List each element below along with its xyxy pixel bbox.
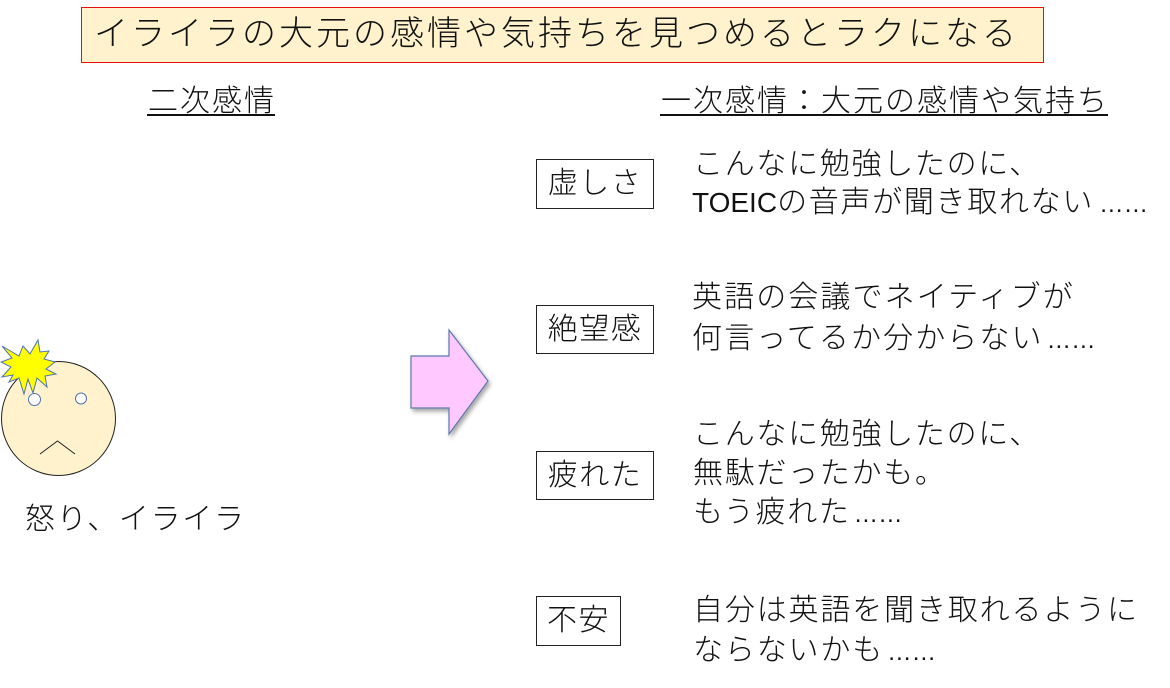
text: tired	[693, 418, 1041, 529]
icon: angry face	[0, 338, 116, 476]
label box: tired: 疲れた	[548, 459, 642, 492]
label: anger: 怒り、イライラ	[25, 503, 246, 536]
title banner	[81, 7, 1044, 63]
text: anxiety	[693, 594, 1139, 667]
heading: secondary emotion: 二次感情	[148, 85, 276, 118]
text: emptiness	[692, 148, 1148, 219]
text: emptiness: TOEICの音声が聞き取れない……	[692, 186, 1148, 219]
label box: anxiety	[536, 596, 621, 646]
text: tired: 無駄だったかも。	[693, 457, 947, 490]
heading: primary emotion: 一次感情：大元の感情や気持ち	[661, 85, 1109, 118]
text: tired: もう疲れた……	[693, 496, 903, 529]
label box: anxiety: 不安	[547, 604, 610, 637]
text: anxiety: ならないかも……	[693, 634, 936, 667]
text: tired: こんなに勉強したのに、	[693, 418, 1041, 451]
title text: イライラの大元の感情や気持ちを見つめるとラクになる	[94, 15, 1019, 53]
text: anxiety: 自分は英語を聞き取れるように	[693, 594, 1139, 627]
text: emptiness: こんなに勉強したのに、	[693, 148, 1041, 181]
label box: tired	[536, 451, 654, 500]
label box: emptiness: 虚しさ	[548, 167, 642, 200]
label box: despair	[536, 305, 654, 354]
text: despair: 何言ってるか分からない……	[692, 322, 1096, 355]
text: despair: 英語の会議でネイティブが	[692, 281, 1075, 314]
text: despair	[692, 281, 1096, 355]
arrow	[410, 328, 492, 439]
label box: despair: 絶望感	[548, 313, 642, 346]
label box: emptiness	[536, 159, 654, 209]
